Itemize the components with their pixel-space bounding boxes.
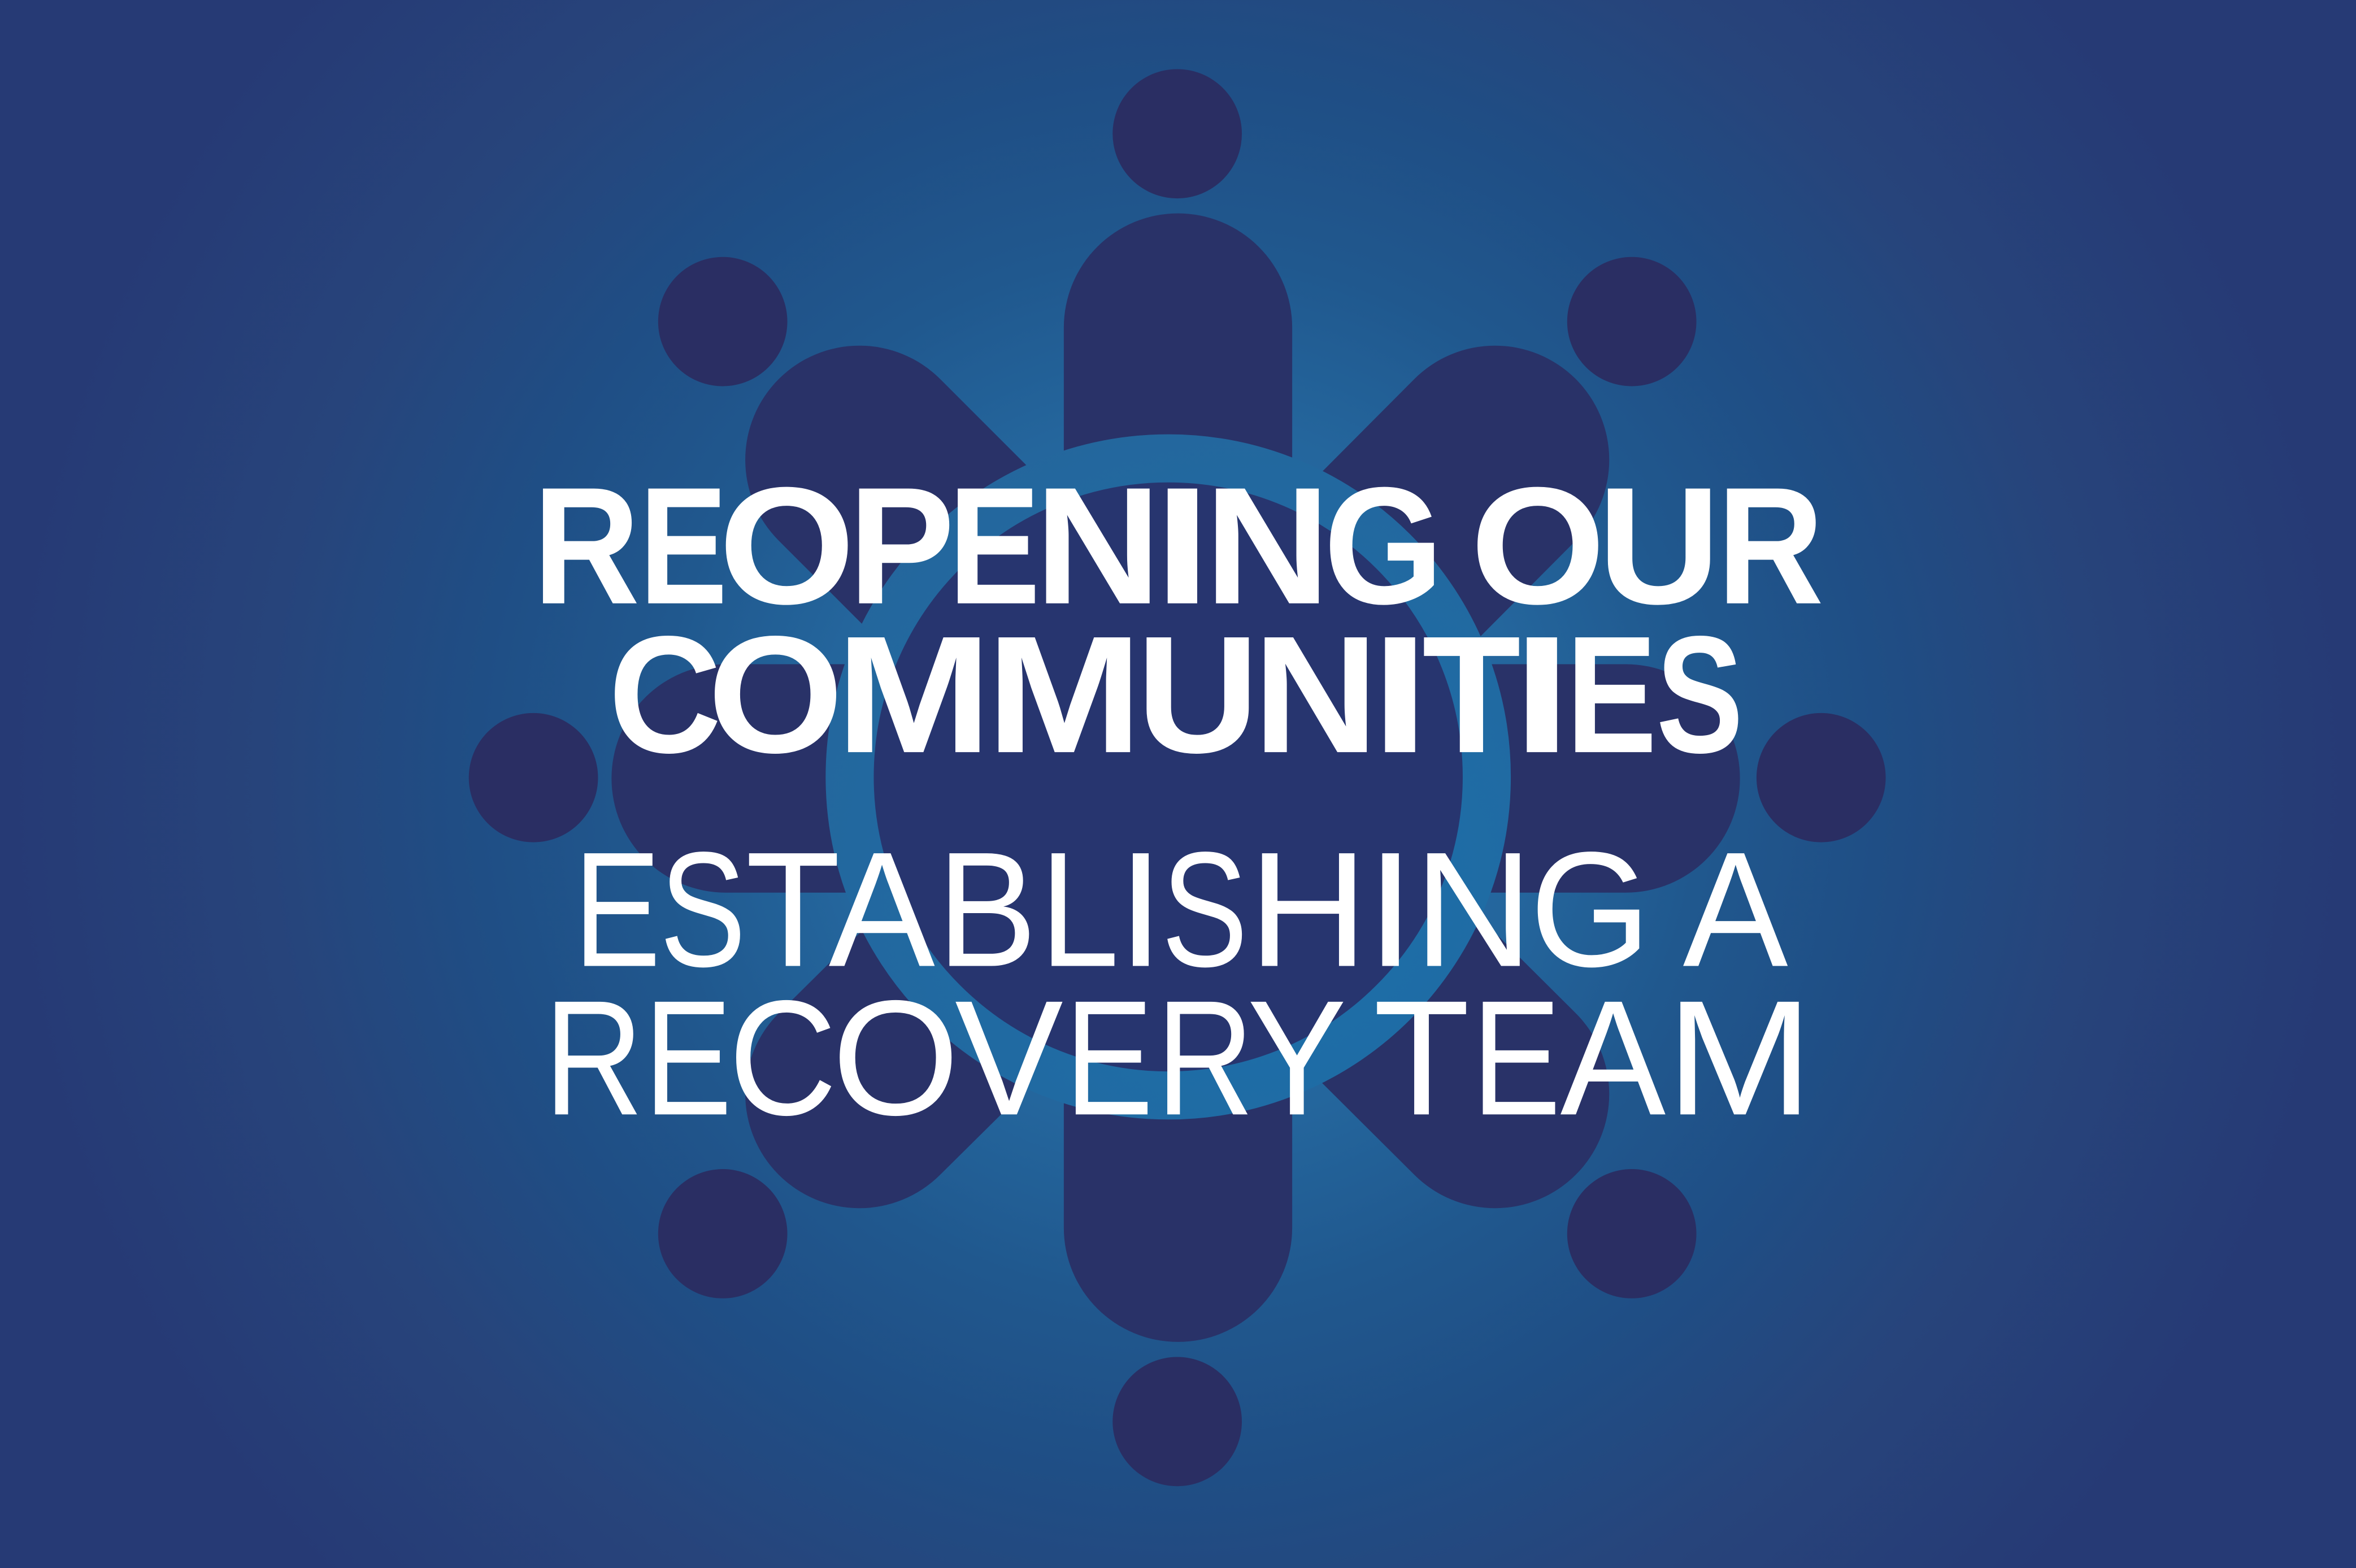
subtitle: establishing a recovery team: G [1530,819,1651,1001]
subtitle: establishing a recovery team: I [1117,819,1164,1001]
icon: circle of people [469,69,1886,1486]
subtitle: establishing a recovery team: E [573,819,660,1001]
subtitle: establishing a recovery team: M [1666,967,1813,1149]
subtitle: establishing a recovery team: I [1366,819,1415,1001]
title: reopening our communities: P [849,453,955,639]
title: reopening our communities: M [836,601,992,788]
title: reopening our communities: E [1566,601,1657,788]
subtitle: establishing a recovery team: S [659,819,746,1001]
subtitle: establishing a recovery team: H [1249,819,1368,1001]
center ring with navy disc [850,458,1487,1096]
subtitle: establishing a recovery team: B [937,819,1037,1001]
title: reopening our communities [533,453,1824,788]
subtitle: establishing a recovery team: S [1162,819,1248,1001]
title: reopening our communities: I [1154,453,1211,639]
title: reopening our communities: O [719,453,855,639]
subtitle: establishing a recovery team: A [829,819,936,1001]
subtitle: establishing a recovery team: V [955,967,1064,1149]
title: reopening our communities: R [533,453,640,639]
title: reopening our communities: N [1205,453,1331,639]
title: reopening our communities: R [1717,453,1824,639]
title: reopening our communities: N [1253,601,1379,788]
subtitle: establishing a recovery team: R [1156,967,1254,1149]
subtitle: establishing a recovery team: A [1560,967,1667,1149]
subtitle: establishing a recovery team: O [832,967,959,1149]
title: reopening our communities: E [949,453,1040,639]
title: reopening our communities: M [986,601,1143,788]
title: reopening our communities: C [608,601,721,788]
subtitle: establishing a recovery team [544,819,1813,1149]
subtitle: establishing a recovery team: A [1683,819,1789,1001]
title: reopening our communities: I [1513,601,1571,788]
subtitle: establishing a recovery team: R [544,967,644,1149]
title: reopening our communities: G [1324,453,1444,639]
person heads [469,69,1886,1486]
subtitle: establishing a recovery team: E [1065,967,1153,1149]
subtitle: establishing a recovery team: N [1414,819,1533,1001]
title: reopening our communities: U [1598,453,1720,639]
title: reopening our communities: I [1371,601,1429,788]
title: reopening our communities: N [1034,453,1162,639]
title: reopening our communities: E [640,453,727,639]
subtitle: establishing a recovery team: T [746,819,840,1001]
subtitle: establishing a recovery team: E [644,967,732,1149]
subtitle: establishing a recovery team: T [1373,967,1470,1149]
title: reopening our communities: O [1471,453,1606,639]
title: reopening our communities: S [1656,601,1743,788]
title: reopening our communities: U [1136,601,1259,788]
subtitle: establishing a recovery team: L [1040,819,1119,1001]
title: reopening our communities: T [1422,601,1521,788]
subtitle: establishing a recovery team: E [1472,967,1561,1149]
subtitle: establishing a recovery team: Y [1247,967,1346,1149]
title: reopening our communities: O [707,601,844,788]
subtitle: establishing a recovery team: C [729,967,837,1149]
person bodies [726,328,1626,1228]
